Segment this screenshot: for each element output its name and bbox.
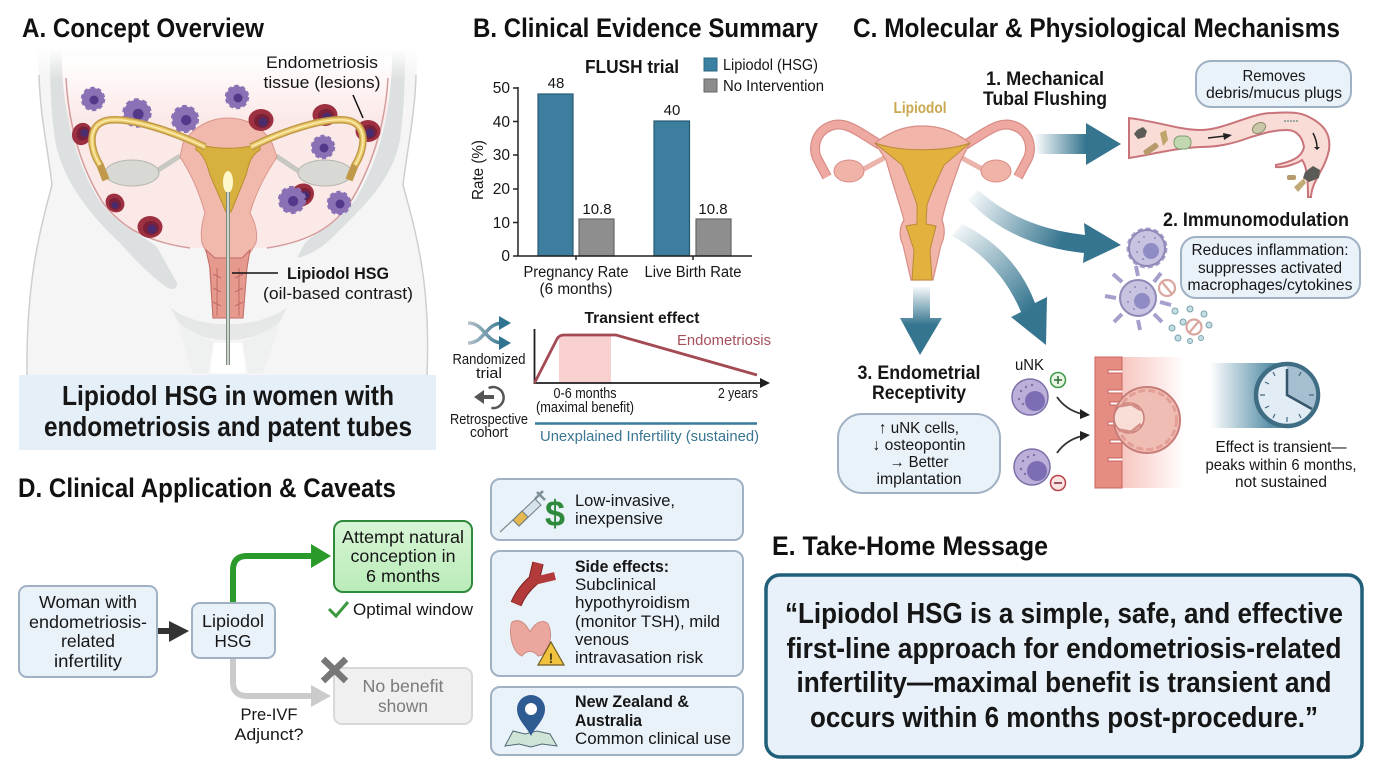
arrow: to Lipiodol HSG bbox=[158, 621, 189, 642]
upper macrophage bbox=[1129, 230, 1165, 266]
y axis labels: 30 bbox=[493, 147, 510, 164]
uterus body bbox=[875, 126, 970, 280]
icon: clock with fading bar bbox=[1210, 363, 1318, 428]
callout: uNK cells and osteopontin: → Better bbox=[890, 454, 949, 471]
label: endometriosis tissue: Endometriosis bbox=[266, 53, 378, 72]
arrow: gray pathway bbox=[233, 658, 331, 707]
icon: retrospective cohort return arrow bbox=[474, 386, 505, 408]
panel: New Zealand and Australia bbox=[491, 687, 743, 755]
left tube bbox=[815, 125, 880, 177]
icon: location pin bbox=[517, 695, 545, 736]
icon: plus sign bbox=[1050, 372, 1066, 388]
bars bbox=[538, 94, 731, 256]
pelvic cavity edge bbox=[66, 78, 388, 248]
callout: reduces inflammation bbox=[1181, 237, 1360, 298]
blastocyst bbox=[1114, 387, 1180, 453]
lower macrophage spikes bbox=[1105, 266, 1171, 330]
heading: 1. Mechanical Tubal Flushing: Tubal Flushing bbox=[983, 88, 1107, 110]
label: randomized trial: trial bbox=[476, 366, 502, 382]
ovary left bbox=[105, 160, 159, 186]
label: Lipiodol HSG bbox=[263, 264, 413, 303]
fallopian tubes lumen bbox=[92, 120, 363, 165]
panel: take-home message quote: infertility—maximal benefit is transient and bbox=[796, 667, 1332, 699]
flow arrow heads bbox=[1223, 133, 1320, 150]
callout: removes debris bbox=[1196, 61, 1351, 107]
panel: take-home message quote: occurs within 6 months post-procedure.” bbox=[810, 702, 1318, 734]
box: no benefit shown: No benefit bbox=[362, 676, 444, 696]
heading: 3. Endometrial Receptivity: Receptivity bbox=[872, 382, 966, 404]
inner cell mass bbox=[1114, 403, 1144, 433]
upper macrophage edge bbox=[1128, 229, 1166, 267]
label: randomized trial bbox=[452, 352, 526, 382]
box: woman with endometriosis-related infertility: endometriosis- bbox=[29, 612, 147, 632]
box: no benefit shown bbox=[334, 668, 472, 724]
icon: syringe bbox=[500, 491, 545, 532]
icon: uNK cell positive bbox=[1012, 379, 1048, 415]
vaginal canal bbox=[206, 250, 250, 318]
text: effect is transient: not sustained bbox=[1235, 474, 1327, 491]
icon: minus sign bbox=[1050, 476, 1066, 490]
curve label: Endometriosis bbox=[677, 332, 771, 349]
label: endometriosis tissue bbox=[264, 53, 380, 92]
uterus body and cervix bbox=[180, 118, 277, 318]
icon: blood vessel bbox=[516, 563, 555, 604]
box: attempt natural conception: Attempt natural bbox=[342, 527, 464, 547]
heading: 1. Mechanical Tubal Flushing bbox=[983, 68, 1107, 110]
icon: map bbox=[505, 731, 557, 747]
text bbox=[575, 491, 675, 528]
label: Lipiodol HSG: Lipiodol HSG bbox=[287, 264, 389, 283]
text: (monitor TSH), mild bbox=[575, 612, 720, 631]
axes bbox=[534, 329, 764, 383]
sustained label: Unexplained Infertility (sustained) bbox=[540, 428, 759, 445]
gap between legs bbox=[210, 343, 246, 373]
text: intravasation risk bbox=[575, 648, 703, 667]
text: Australia bbox=[575, 711, 643, 730]
y axis labels: 10 bbox=[493, 215, 510, 232]
rugae bbox=[213, 268, 243, 316]
left abdominal wall band bbox=[50, 50, 177, 289]
axis labels bbox=[536, 386, 758, 416]
heading: C. Molecular and Physiological Mechanisms: C. Molecular & Physiological Mechanisms bbox=[853, 13, 1340, 43]
chart: transient effect timeline bbox=[534, 310, 771, 445]
y axis title: Rate (%) bbox=[470, 140, 487, 200]
contrast glow bbox=[223, 171, 233, 193]
heading: 3. Endometrial Receptivity: 3. Endometrial bbox=[858, 362, 980, 384]
label: Pre-IVF adjunct: Adjunct? bbox=[234, 725, 304, 744]
heading: 1. Mechanical Tubal Flushing: 1. Mechanical bbox=[986, 68, 1104, 90]
torso silhouette bbox=[27, 50, 428, 375]
sustained line bbox=[535, 422, 757, 425]
text: Side effects: bbox=[575, 557, 669, 576]
callout: removes debris: Removes bbox=[1242, 68, 1306, 85]
box: woman with endometriosis-related infertility: related bbox=[61, 631, 115, 651]
uterine cavity filled with Lipiodol bbox=[875, 143, 970, 280]
ovaries bbox=[834, 160, 1011, 182]
chart title: Transient effect bbox=[584, 310, 700, 327]
callout: uNK cells and osteopontin: implantation bbox=[876, 471, 962, 488]
flow arrows bbox=[1208, 133, 1317, 147]
label: retrospective cohort bbox=[450, 412, 528, 441]
box: woman with endometriosis-related infertility bbox=[19, 586, 157, 677]
clock hands bbox=[1287, 369, 1312, 409]
icon: gray cross bbox=[323, 659, 346, 681]
flowchart: clinical pathway bbox=[19, 521, 474, 744]
legend: Lipiodol (HSG) bbox=[723, 57, 818, 74]
heading: B. Clinical Evidence Summary: B. Clinical Evidence Summary bbox=[473, 13, 818, 43]
lower macrophage bbox=[1120, 280, 1156, 316]
clock face bbox=[1256, 364, 1318, 426]
illustration: uterus with Lipiodol bbox=[815, 125, 1030, 280]
illustration: fallopian tube flushing bbox=[1129, 112, 1329, 197]
label: Pre-IVF adjunct bbox=[234, 705, 304, 744]
right tube outline bbox=[965, 125, 1030, 177]
heading: E. Take-Home Message: E. Take-Home Message bbox=[772, 531, 1048, 561]
ovary right bbox=[298, 160, 352, 186]
icon: randomized trial shuffle arrows bbox=[468, 316, 511, 350]
arrow: green pathway bbox=[233, 544, 331, 603]
right tube bbox=[965, 125, 1030, 177]
icon: thyroid bbox=[510, 621, 550, 656]
lower pelvis crescent bbox=[170, 307, 287, 340]
no symbol bbox=[1159, 280, 1202, 334]
banner: topic title bbox=[19, 375, 436, 450]
text: Low-invasive, bbox=[575, 491, 675, 510]
text: effect is transient: peaks within 6 months, bbox=[1206, 457, 1356, 474]
illustration: endometrium with implanting embryo bbox=[1095, 357, 1185, 488]
panel: take-home message quote bbox=[766, 575, 1362, 757]
label: uNK: uNK bbox=[1015, 357, 1044, 374]
chart: FLUSH trial bar chart bbox=[470, 57, 824, 298]
axis labels: 2 years bbox=[718, 386, 758, 402]
box: woman with endometriosis-related infertility: Woman with bbox=[39, 592, 137, 612]
label: randomized trial: Randomized bbox=[452, 352, 526, 368]
text: effect is transient bbox=[1206, 439, 1356, 491]
label: retrospective cohort: Retrospective bbox=[450, 412, 528, 428]
box: woman with endometriosis-related infertility: infertility bbox=[54, 651, 122, 671]
cytokine dots bbox=[1169, 306, 1212, 344]
callout: reduces inflammation: Reduces inflammation: bbox=[1192, 242, 1348, 259]
icon: warning triangle: ! bbox=[549, 650, 553, 666]
value labels: 10.8 bbox=[698, 201, 728, 218]
text: hypothyroidism bbox=[575, 593, 690, 612]
arrow: to endometrium bbox=[952, 224, 1047, 345]
text: New Zealand & bbox=[575, 692, 689, 711]
callout: reduces inflammation: suppresses activated bbox=[1198, 260, 1342, 277]
arrow: to immunomodulation bbox=[968, 190, 1121, 263]
tube wall bbox=[1129, 112, 1329, 197]
arrows: uNK to endometrium bbox=[1057, 397, 1090, 453]
endometriosis curve bbox=[534, 335, 757, 383]
icon: uNK cell negative bbox=[1014, 449, 1050, 485]
text bbox=[575, 557, 720, 667]
y axis labels: 50 bbox=[493, 80, 510, 97]
elapsed sector bbox=[1287, 366, 1316, 410]
y axis labels: 20 bbox=[493, 181, 510, 198]
box: no benefit shown: shown bbox=[378, 696, 428, 716]
heading: D. Clinical Application and Caveats: D. Clinical Application & Caveats bbox=[18, 473, 396, 503]
box: attempt natural conception: conception in bbox=[350, 546, 456, 566]
left tube outline bbox=[815, 125, 880, 177]
category labels: Live Birth Rate bbox=[644, 264, 742, 281]
legend bbox=[704, 57, 824, 95]
value labels: 48 bbox=[548, 75, 564, 92]
y axis labels: 40 bbox=[493, 114, 510, 131]
endometrial wall bbox=[1095, 357, 1122, 488]
torso side lines bbox=[27, 75, 428, 375]
axis labels: (maximal benefit) bbox=[536, 400, 634, 416]
text: inexpensive bbox=[575, 509, 663, 528]
inner thighs bbox=[178, 324, 280, 373]
callout: reduces inflammation: macrophages/cytokines bbox=[1188, 277, 1352, 294]
callout: uNK cells and osteopontin bbox=[838, 414, 1000, 493]
arrow: to receptivity bbox=[900, 287, 942, 355]
label: Lipiodol HSG: (oil-based contrast) bbox=[263, 284, 413, 303]
category labels: (6 months) bbox=[540, 281, 612, 298]
legend: No Intervention bbox=[723, 78, 824, 95]
value labels bbox=[548, 75, 728, 218]
label: optimal window: Optimal window bbox=[353, 600, 474, 619]
axes bbox=[513, 87, 752, 260]
box: Lipiodol HSG: HSG bbox=[214, 631, 252, 651]
shaded maximal benefit window bbox=[559, 335, 611, 383]
fallopian tubes highlight bbox=[92, 120, 363, 165]
box: Lipiodol HSG bbox=[192, 603, 275, 658]
label: retrospective cohort: cohort bbox=[470, 425, 508, 441]
catheter bbox=[226, 192, 230, 365]
icon: check mark bbox=[329, 602, 348, 616]
y axis labels bbox=[493, 80, 510, 265]
text: Subclinical bbox=[575, 575, 656, 594]
motion fade bbox=[1210, 363, 1287, 428]
endometriosis lesions bbox=[69, 86, 381, 238]
category labels bbox=[524, 264, 742, 298]
box: attempt natural conception bbox=[334, 521, 472, 592]
label: Pre-IVF adjunct: Pre-IVF bbox=[240, 705, 298, 724]
heading: 2. Immunomodulation: 2. Immunomodulation bbox=[1163, 209, 1349, 231]
uterine cavity with contrast bbox=[196, 143, 260, 212]
value labels: 10.8 bbox=[582, 201, 612, 218]
catheter core bbox=[227, 192, 229, 365]
text: Common clinical use bbox=[575, 729, 731, 748]
text: effect is transient: Effect is transient— bbox=[1216, 439, 1346, 456]
icon: warning triangle bbox=[538, 642, 564, 666]
heading: A. Concept Overview: A. Concept Overview bbox=[22, 13, 264, 43]
panel: low-invasive, inexpensive bbox=[491, 479, 743, 540]
callout: removes debris: debris/mucus plugs bbox=[1206, 85, 1342, 102]
chart title: FLUSH trial bbox=[585, 57, 679, 77]
label: Lipiodol: Lipiodol bbox=[894, 100, 946, 117]
fallopian tubes outer wall bbox=[92, 120, 363, 180]
box: attempt natural conception: 6 months bbox=[366, 566, 440, 586]
right abdominal wall band bbox=[297, 50, 405, 258]
ligaments bbox=[155, 156, 300, 172]
y axis labels: 0 bbox=[501, 248, 510, 265]
axis labels: 0-6 months bbox=[554, 386, 616, 402]
panel: side effects bbox=[491, 551, 743, 676]
icon: dollar sign: $ bbox=[545, 493, 565, 534]
arrow: to mechanical flushing bbox=[1034, 123, 1121, 165]
label: endometriosis tissue: tissue (lesions) bbox=[264, 73, 380, 92]
text: venous bbox=[575, 630, 629, 649]
axis arrow head bbox=[760, 378, 770, 388]
debris particles bbox=[1134, 120, 1320, 192]
icon: macrophages and cytokines bbox=[1105, 229, 1212, 344]
inner cell mass cells bbox=[1120, 404, 1141, 432]
heading: 3. Endometrial Receptivity bbox=[858, 362, 980, 404]
panel: concept overview anatomy illustration bbox=[27, 50, 428, 375]
value labels: 40 bbox=[664, 102, 680, 119]
category labels: Pregnancy Rate bbox=[524, 264, 628, 281]
callout: uNK cells and osteopontin: ↓ osteopontin bbox=[872, 437, 966, 454]
trophoblast ring bbox=[1118, 390, 1176, 450]
text bbox=[575, 692, 731, 748]
callout: uNK cells and osteopontin: ↑ uNK cells, bbox=[879, 420, 959, 437]
pink fade bbox=[1122, 357, 1185, 488]
banner: topic title: endometriosis and patent tubes bbox=[44, 411, 412, 442]
banner: topic title: Lipiodol HSG in women with bbox=[62, 380, 394, 411]
box: Lipiodol HSG: Lipiodol bbox=[202, 611, 264, 631]
pelvic cavity bbox=[62, 57, 392, 248]
clock ticks bbox=[1260, 372, 1314, 422]
ligaments bbox=[862, 158, 984, 170]
leader lines bbox=[232, 95, 363, 273]
